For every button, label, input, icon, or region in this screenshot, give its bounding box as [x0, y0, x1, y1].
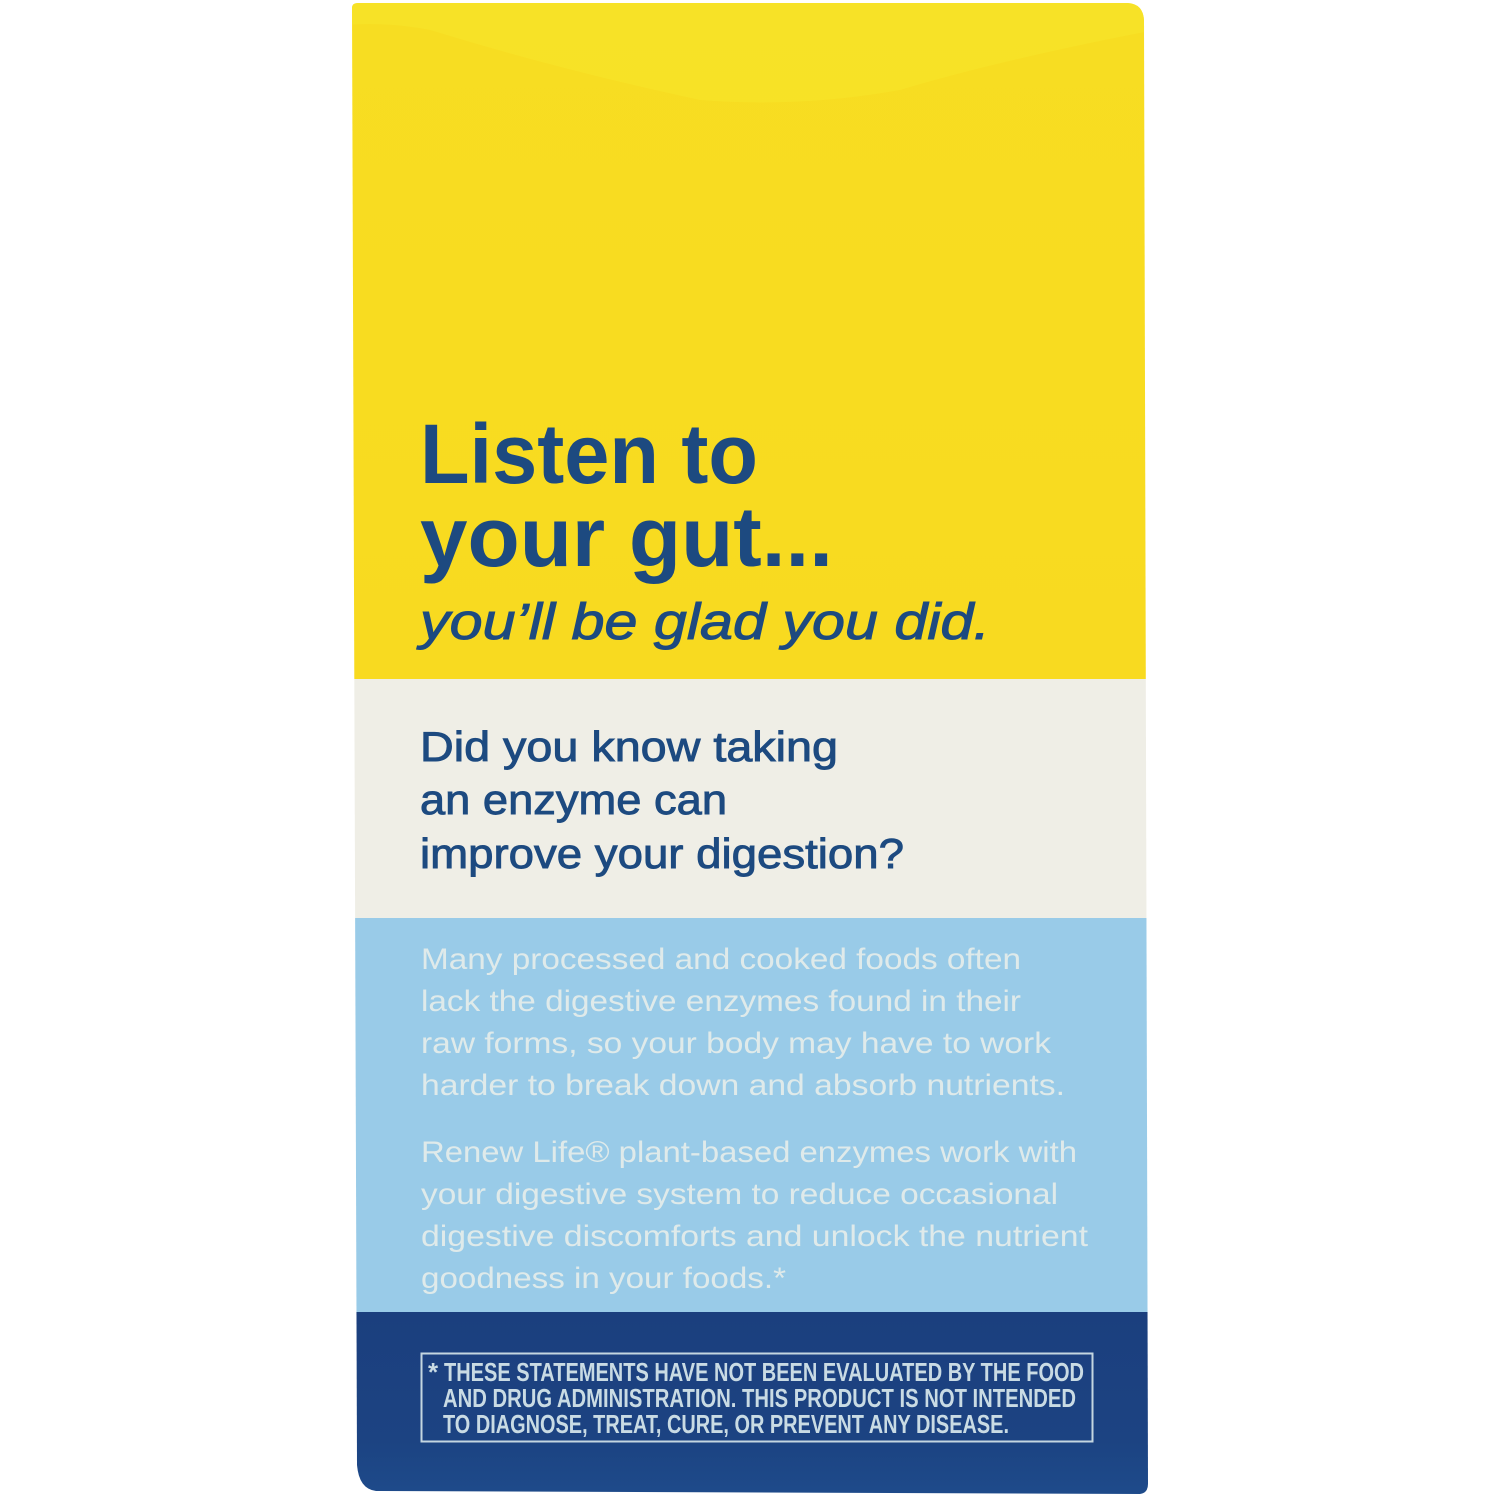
panel: cream question band — [345, 679, 1155, 918]
headline — [420, 407, 833, 584]
product box back panel — [352, 3, 1148, 1494]
body paragraph: processed foods: Many processed and cooked foods often — [421, 943, 1021, 976]
panel: light blue body band — [345, 918, 1155, 1312]
body paragraph: plant-based enzymes: Renew Life® plant-based enzymes work with — [421, 1136, 1077, 1169]
disclaimer box: AND DRUG ADMINISTRATION. THIS PRODUCT IS NOT INTENDED — [443, 1383, 1076, 1413]
disclaimer box — [422, 1354, 1092, 1442]
question heading: an enzyme can — [420, 776, 727, 823]
body paragraph: processed foods: raw forms, so your body may have to work — [421, 1027, 1052, 1060]
body paragraph: plant-based enzymes — [421, 1136, 1089, 1295]
disclaimer box: THESE STATEMENTS HAVE NOT BEEN EVALUATED BY THE FOOD — [444, 1357, 1084, 1387]
body paragraph: plant-based enzymes: your digestive system to reduce occasional — [421, 1178, 1058, 1211]
tagline: you’ll be glad you did. — [417, 593, 990, 650]
gloss highlight on yellow band — [352, 3, 1144, 24]
headline: Listen to — [420, 407, 758, 501]
question heading — [420, 723, 904, 877]
question heading: Did you know taking — [420, 723, 838, 770]
body paragraph: plant-based enzymes: goodness in your foods.* — [421, 1262, 786, 1295]
disclaimer box: * — [428, 1357, 439, 1387]
body paragraph: processed foods: lack the digestive enzymes found in their — [421, 985, 1021, 1018]
body paragraph: plant-based enzymes: digestive discomforts and unlock the nutrient — [421, 1220, 1089, 1253]
panel: yellow headline band — [345, 0, 1155, 679]
headline: your gut... — [420, 490, 833, 584]
panel: navy disclaimer band — [345, 1312, 1155, 1497]
question heading: improve your digestion? — [420, 830, 904, 877]
body paragraph: processed foods: harder to break down and absorb nutrients. — [421, 1069, 1065, 1102]
body paragraph: processed foods — [421, 943, 1065, 1102]
disclaimer box: TO DIAGNOSE, TREAT, CURE, OR PREVENT ANY DISEASE. — [443, 1409, 1009, 1439]
